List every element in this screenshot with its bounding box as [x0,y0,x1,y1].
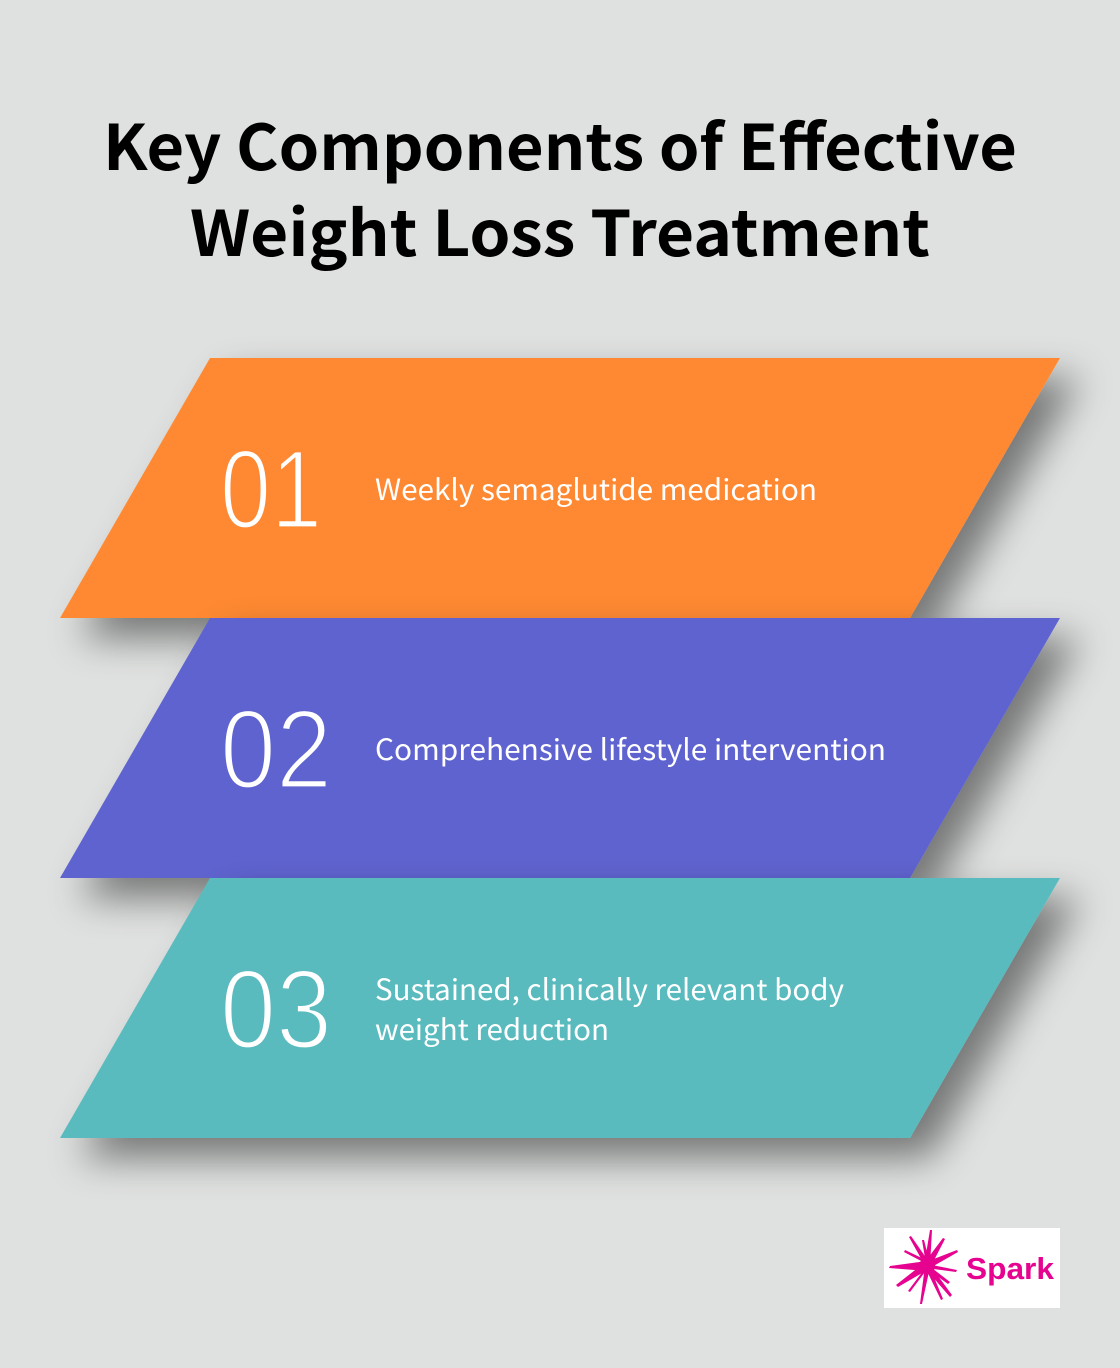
panel: step 03 [60,878,1060,1138]
number 03: 03 [220,947,332,1072]
logo wordmark: Spark [966,1251,1055,1286]
number 01: 01 [220,427,322,552]
title [103,98,1017,275]
text: sustained body weight reduction [375,967,844,1049]
logo: Spark [884,1228,1060,1308]
text: sustained body weight reduction: weight reduction [375,1007,609,1049]
panel: step 02 [60,618,1060,878]
title: Key Components of Effective [103,98,1017,189]
text: comprehensive lifestyle intervention: Comprehensive lifestyle intervention [375,727,886,769]
panel: step 01 [60,358,1060,618]
icon: spark burst [889,1230,958,1304]
teal parallelogram [60,878,1060,1138]
number 02: 02 [220,687,332,812]
text: sustained body weight reduction: Sustained, clinically relevant body [375,967,844,1009]
purple parallelogram [60,618,1060,878]
text: weekly semaglutide medication: Weekly semaglutide medication [375,467,817,509]
title: Weight Loss Treatment [190,184,930,275]
orange parallelogram [60,358,1060,618]
